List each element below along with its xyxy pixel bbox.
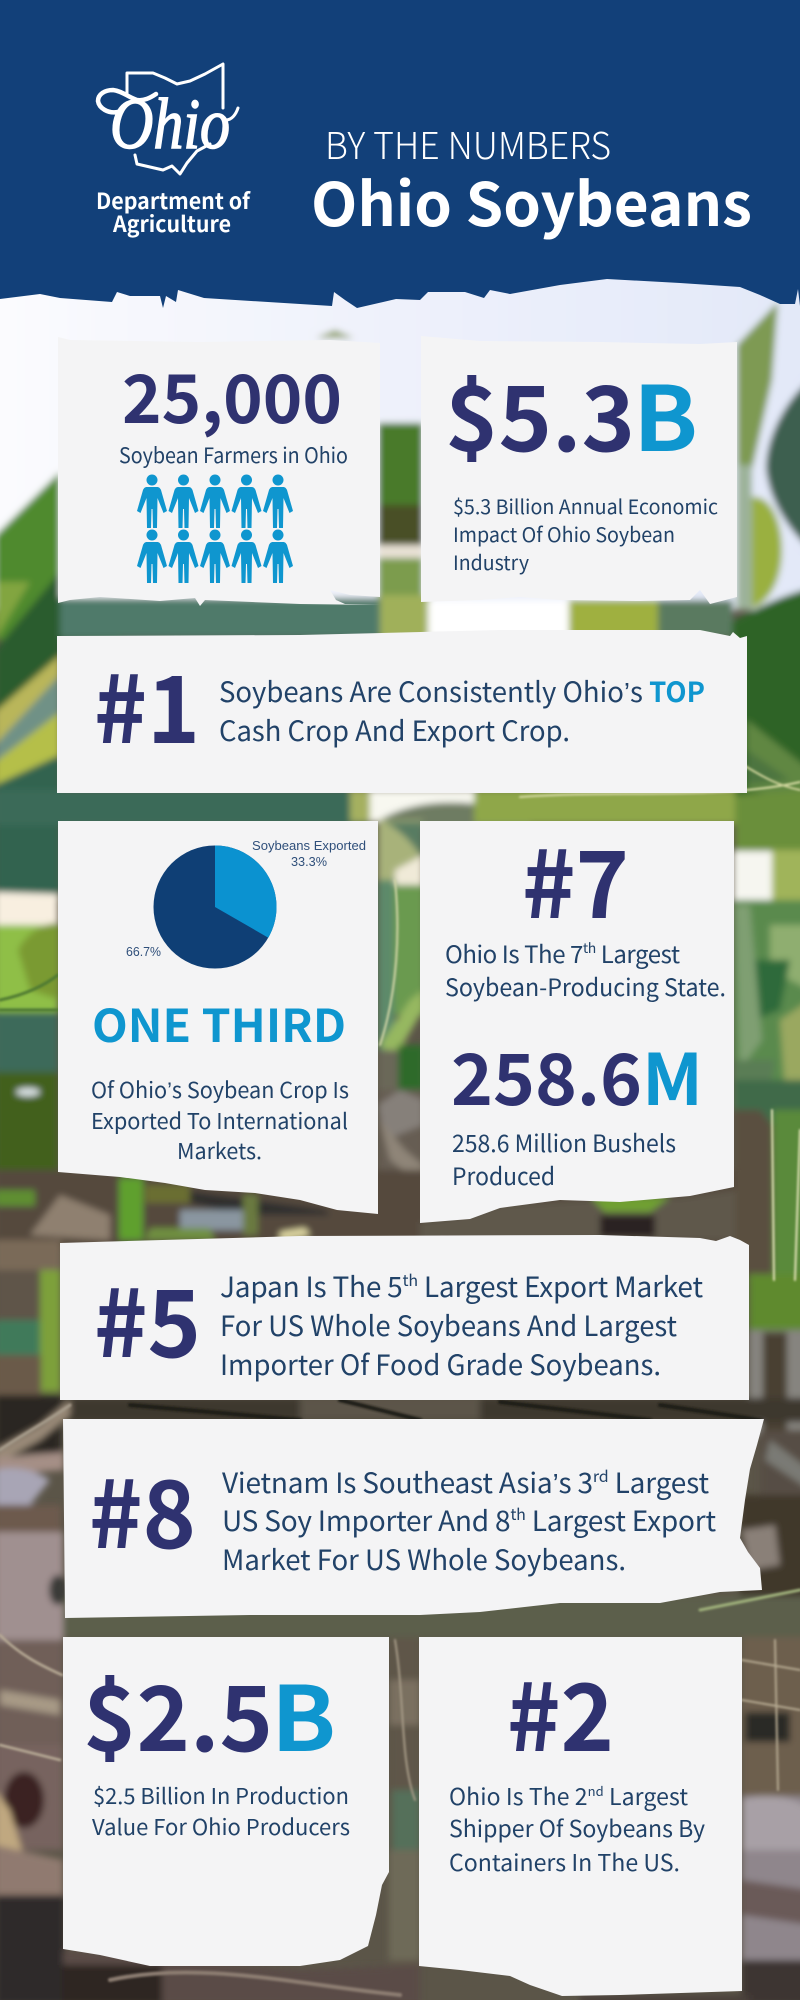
description: Ohio Is The 2 [449,1778,588,1812]
description line 2: Largest Export [526,1500,716,1540]
description: $2.5 Billion In Production [93,1779,349,1811]
description: Of Ohio’s Soybean Crop Is [91,1073,349,1105]
description line 2: Produced [452,1157,555,1192]
description line 3: Market For US Whole Soybeans. [222,1539,626,1579]
panel: #8 [63,1419,764,1618]
stat: #5: #5 [94,1249,201,1384]
swoosh of the script O [98,90,156,112]
pie label: remainder share: 66.7% [126,944,161,959]
description: 258.6 Million Bushels [452,1124,676,1159]
script wordmark: Ohio [110,84,230,164]
right lower [735,1080,800,1280]
pie label: exported share: 33.3% [291,854,327,869]
description line 2: Shipper Of Soybeans By [449,1810,705,1844]
department name line 2: Agriculture [112,207,231,239]
description: nd [588,1781,604,1800]
between top panels [378,423,423,507]
caption: Soybean Farmers in Ohio [119,440,348,470]
heading: by the numbers: BY THE NUMBERS [325,116,611,170]
panel: $5.3B [421,336,737,604]
department name: Department of [96,184,251,216]
pie chart [126,838,366,968]
panel: #7 and 258.6M [420,810,734,1223]
heading: one third: ONE THIRD [92,990,346,1055]
stat unit: B [633,347,698,477]
panel: 25,000 farmers [58,337,380,606]
description: rd [593,1463,609,1487]
band below top panels [60,598,385,638]
panel: #2 [419,1637,742,1996]
description line 2: US Soy Importer And 8 [222,1500,511,1540]
stat: $5.3: $5.3 [445,347,635,477]
description [453,491,718,576]
description: Soybeans Are Consistently Ohio’s TOP [219,671,705,711]
description line 2: th [510,1501,526,1525]
description: Largest [604,1778,688,1812]
description line 3: Importer Of Food Grade Soybeans. [220,1344,661,1384]
description [92,1779,350,1842]
panel: one third [58,821,378,1214]
stat: #7: #7 [522,810,629,945]
description: Impact Of Ohio Soybean [453,519,675,548]
description: Largest [609,1462,709,1502]
Ohio logo [96,64,251,239]
band [0,1596,800,1638]
description: Industry [453,547,530,576]
description: Largest Export Market [418,1266,703,1306]
pie label: exported: Soybeans Exported [252,838,366,853]
panel: #1 [57,630,747,793]
stat: #8: #8 [89,1440,196,1575]
header band [0,0,800,308]
description: Exported To International [91,1104,348,1136]
description line 2: For US Whole Soybeans And Largest [220,1305,677,1345]
description [91,1073,349,1166]
upper left leaf [0,472,60,640]
torn blue header shape [0,0,800,308]
description: Markets. [177,1134,262,1166]
stat unit: M [642,1024,703,1126]
description line 2: Cash Crop And Export Crop. [219,710,570,750]
stat unit: B [271,1647,336,1777]
left lower [0,1240,61,1280]
band below #1 [0,790,370,825]
center low [389,1637,420,2000]
right upper leaves [737,302,778,610]
description: Ohio Is The 7 [445,935,583,970]
stat: 258.6: 258.6 [451,1024,642,1126]
soil band [0,1170,800,1250]
left stripes [0,640,60,720]
description: Vietnam Is Southeast Asia’s 3 [222,1462,593,1502]
description: Largest [596,935,680,970]
description: Japan Is The 5 [220,1266,403,1306]
title: Ohio Soybeans: Ohio Soybeans [311,157,752,244]
stat: #2: #2 [507,1643,614,1778]
description: $5.3 Billion Annual Economic [453,491,718,520]
tail of the script o [226,108,238,120]
description line 3: Containers In The US. [449,1844,680,1878]
icon: people row [137,474,293,583]
stat: 25,000: 25,000 [122,346,342,443]
stat: #1: #1 [94,635,200,770]
description: Value For Ohio Producers [92,1810,350,1842]
description line 2: Soybean-Producing State. [445,968,726,1003]
description: th [583,938,596,958]
description: th [403,1267,418,1291]
state outline [127,64,223,174]
panel: #5 [60,1235,749,1400]
left mid [0,892,58,935]
center strip [378,820,423,880]
panel: $2.5B [63,1637,389,1966]
right mid [733,851,773,903]
stat: $2.5: $2.5 [83,1647,273,1777]
